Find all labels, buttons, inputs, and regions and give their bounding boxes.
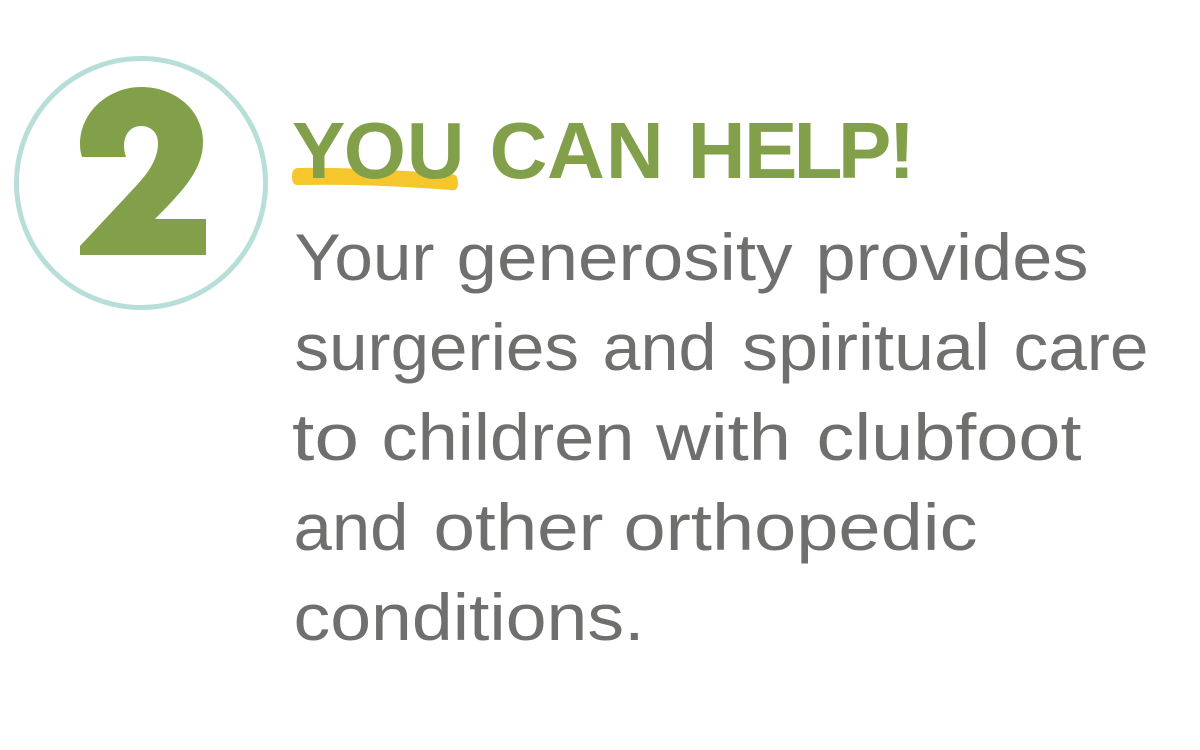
line 4: orthopedic: [624, 490, 978, 564]
line 4: other: [434, 490, 604, 564]
line 3: with: [655, 400, 791, 474]
line 5: conditions.: [294, 580, 644, 654]
body text: [292, 220, 1148, 654]
line 3: clubfoot: [816, 400, 1082, 474]
line 4: [294, 490, 978, 564]
line 1: Your: [294, 220, 434, 294]
badge ring: [16, 58, 266, 308]
number badge: [16, 58, 266, 308]
line 4: and: [294, 490, 408, 564]
heading: YOU CAN HELP!: [0, 106, 915, 195]
numeral 2: [80, 87, 206, 255]
line 1: provides: [816, 220, 1088, 294]
line 2: care: [1014, 310, 1148, 384]
line 3: children: [382, 400, 634, 474]
line 2: surgeries: [294, 310, 579, 384]
line 1: generosity: [456, 220, 792, 294]
line 3: [292, 400, 1082, 474]
line 1: [294, 220, 1088, 294]
line 2: spiritual: [742, 310, 990, 384]
highlight underline: [292, 168, 458, 190]
line 3: to: [292, 400, 359, 474]
line 2: [294, 310, 1148, 384]
line 2: and: [602, 310, 716, 384]
